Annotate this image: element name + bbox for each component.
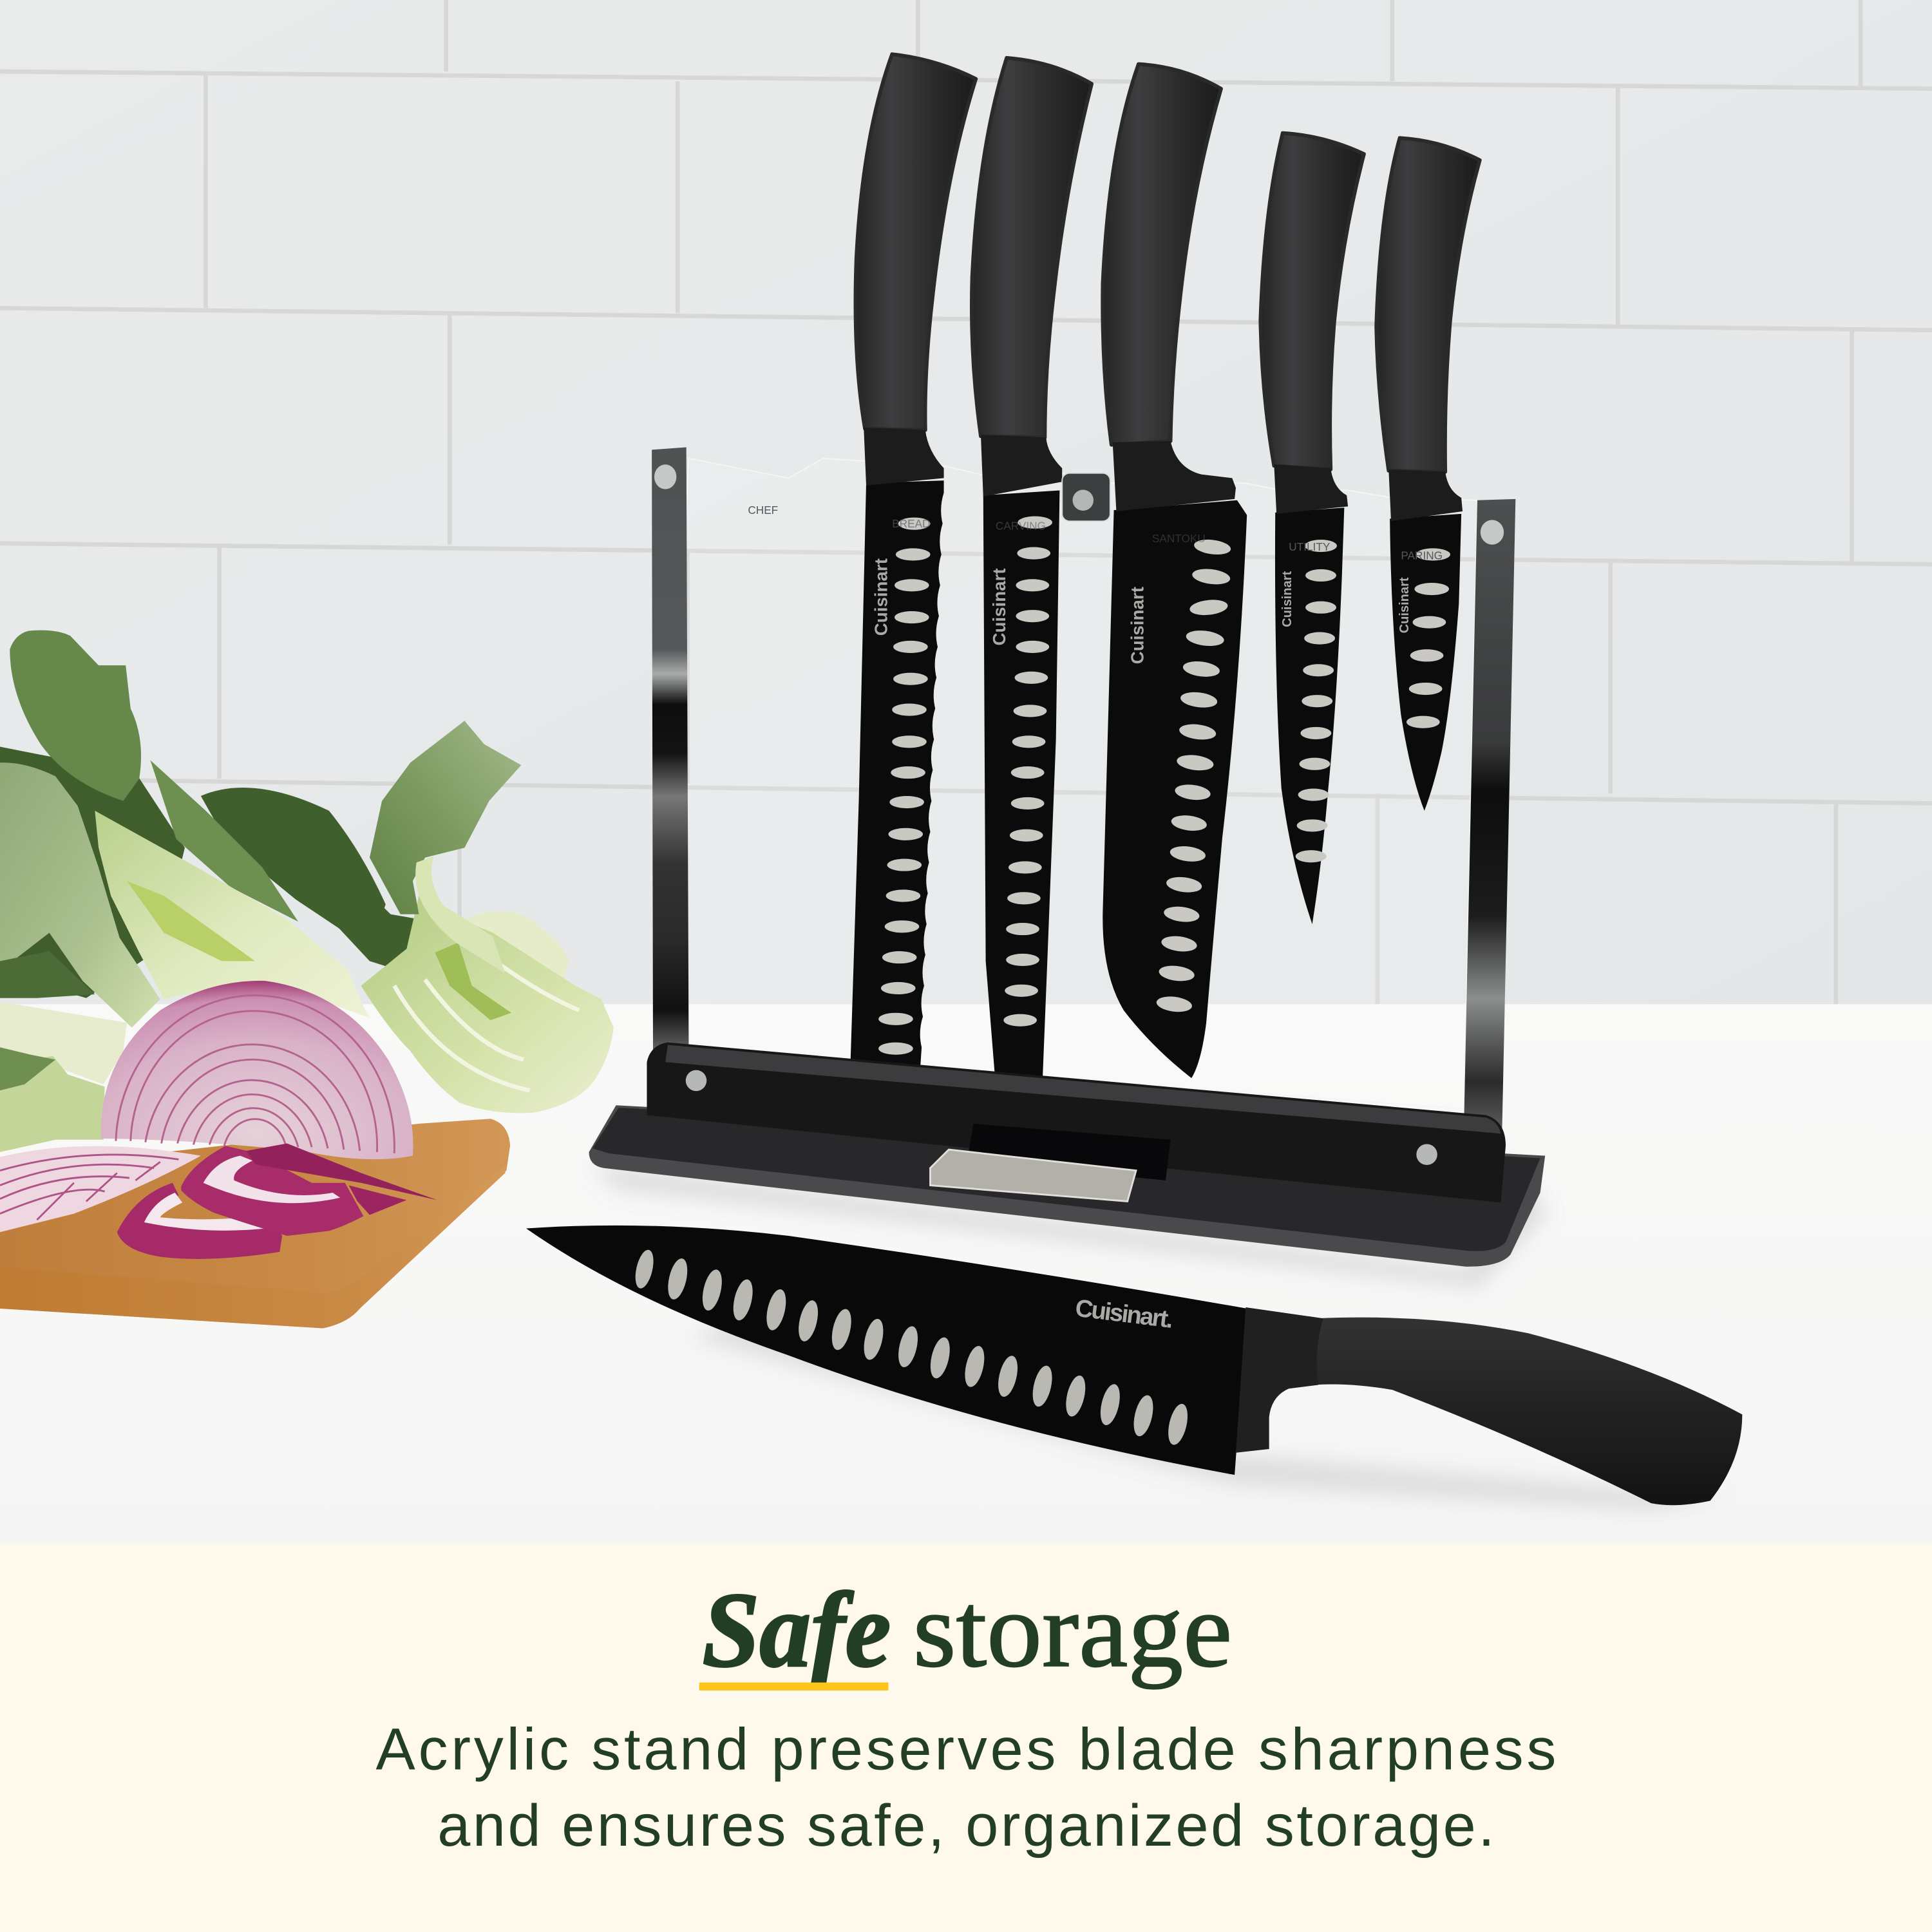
bolster (981, 435, 1062, 497)
middle bulb (95, 811, 370, 1018)
brand: Cuisinart (871, 558, 891, 636)
body text (376, 1716, 1556, 1859)
background: white counter (0, 1004, 1932, 1546)
cut stalks (0, 1056, 105, 1152)
screw: left (686, 1070, 706, 1091)
onion flap (247, 1144, 437, 1200)
caption band (0, 1544, 1932, 1932)
handle (1260, 133, 1364, 469)
screw: right (1416, 1144, 1437, 1165)
bolster (1113, 441, 1236, 511)
holes (1003, 516, 1052, 1027)
brand: Cuisinart. (1074, 1294, 1175, 1334)
blade (1103, 500, 1247, 1078)
right bulb inner lines (394, 955, 579, 1090)
holes (1406, 548, 1450, 728)
label: BREAD (892, 517, 930, 530)
knife: bread (850, 54, 976, 1084)
middle lighter leaf (150, 760, 298, 922)
onion ring: back (181, 1146, 363, 1236)
left light leaf (0, 762, 160, 1028)
brand: Cuisinart (1280, 571, 1294, 627)
title (703, 1571, 1232, 1690)
blade (1390, 514, 1461, 811)
bolster (864, 428, 944, 486)
blade (850, 480, 944, 1084)
brand: Cuisinart (989, 568, 1009, 646)
blade (526, 1226, 1247, 1475)
label: CHEF slot: CHEF (748, 504, 778, 516)
lower dark leaf (0, 951, 95, 998)
sharpener plate (931, 1150, 1136, 1201)
knife: paring (1376, 138, 1480, 811)
back bulb (464, 911, 569, 980)
title: Safe (703, 1571, 891, 1690)
bolster (1388, 469, 1463, 521)
acrylic stand: right post (1463, 499, 1515, 1193)
background: tiled wall (0, 0, 1932, 1023)
right dark leaf (287, 845, 452, 986)
shadow under stand (591, 1164, 1546, 1287)
sharpener slot (967, 1124, 1171, 1180)
bolster (1274, 464, 1348, 514)
acrylic stand: base plate (589, 1105, 1545, 1267)
body text: and ensures safe, organized storage. (437, 1793, 1495, 1859)
brand: Cuisinart (1397, 577, 1412, 633)
left upper leaf (10, 630, 141, 801)
acrylic stand: centre clip (1062, 473, 1110, 521)
holes (632, 1248, 1191, 1446)
acrylic stand: left post (652, 448, 689, 1059)
middle dark leaf (201, 788, 386, 949)
holes (1155, 538, 1231, 1014)
label: CARVING (996, 520, 1046, 533)
right bulb (361, 896, 614, 1113)
onion slice: flat (0, 1146, 201, 1232)
blade (1275, 507, 1344, 924)
body text: Acrylic stand preserves blade sharpness (376, 1716, 1556, 1782)
shadow (690, 1318, 1725, 1511)
blade (983, 490, 1059, 1084)
cut leaf piece (0, 1047, 55, 1090)
handle (1103, 64, 1221, 445)
handle (1314, 1318, 1742, 1505)
right leaf stalk (415, 857, 505, 973)
foreground chef knife (526, 1226, 1742, 1511)
knife: utility (1260, 133, 1364, 924)
middle heart (127, 881, 255, 961)
dark back leaves (0, 746, 185, 998)
label: SANTOKU (1152, 532, 1206, 545)
screw (1072, 490, 1094, 511)
right upper leaf (370, 721, 521, 914)
handle (855, 54, 976, 430)
acrylic stand: front bar (647, 1043, 1506, 1202)
acrylic stand: transparent panel (659, 459, 1477, 1109)
brand: Cuisinart (1128, 587, 1148, 664)
knife: santoku (1103, 64, 1247, 1078)
label: UTILITY (1289, 540, 1331, 553)
onion ring: front (117, 1183, 282, 1259)
handle (1376, 138, 1480, 472)
handle (972, 58, 1092, 437)
holes (878, 518, 931, 1055)
right heart (435, 943, 511, 1020)
title underline (699, 1683, 888, 1690)
title: storage (913, 1571, 1232, 1690)
bolster (1236, 1307, 1323, 1453)
cutting board (0, 1119, 510, 1328)
label: PARING (1401, 549, 1443, 562)
onion small fragment (348, 1186, 406, 1215)
lower left bulb (0, 1001, 127, 1084)
onion half (101, 981, 413, 1159)
holes (1296, 540, 1337, 862)
screw (654, 464, 676, 489)
screw (1481, 520, 1504, 545)
bok choy (0, 630, 614, 1152)
knife: carving (972, 58, 1092, 1084)
